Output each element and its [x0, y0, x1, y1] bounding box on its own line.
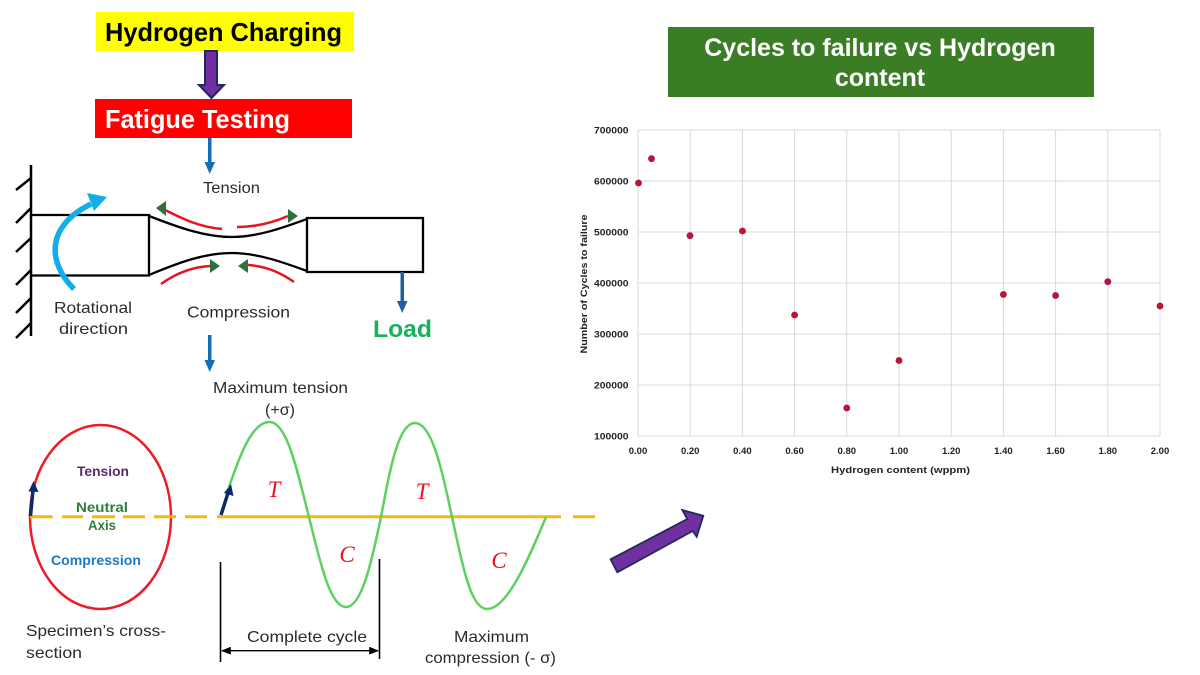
x axis labels: 0.40: [733, 446, 752, 457]
y axis labels: 700000: [594, 126, 628, 136]
y axis labels: 200000: [594, 380, 628, 392]
specimen outline: [31, 215, 423, 276]
x axis labels: 0.60: [785, 446, 804, 457]
y axis labels: 100000: [594, 432, 628, 442]
arrow: fatigue testing to specimen: [204, 138, 215, 174]
x axis title: Hydrogen content (wppm): [831, 465, 970, 476]
wave letters: C: [339, 542, 355, 567]
stress wave: [229, 422, 546, 609]
load arrow: [397, 272, 408, 313]
label: Specimen's cross-section: section: [26, 645, 82, 662]
compression arrows: [161, 259, 294, 284]
x axis labels: 2.00: [1151, 446, 1169, 457]
label: Compression: Compression: [187, 304, 290, 322]
heading: Hydrogen Charging: Hydrogen Charging: [105, 17, 342, 47]
label: Neutral Axis: Neutral: [76, 499, 128, 515]
label: Compression zone: Compression: [51, 553, 141, 568]
fixed wall: [16, 165, 31, 338]
label: Rotational direction: direction: [59, 321, 128, 338]
label: Tension zone: Tension: [77, 464, 129, 479]
label: Maximum compression: compression (- σ): [425, 650, 556, 667]
wave letters: T: [416, 479, 431, 504]
chart title: content: [835, 64, 926, 92]
x axis labels: 1.60: [1046, 446, 1065, 457]
x axis labels: 1.80: [1099, 446, 1117, 457]
x axis labels: 1.20: [942, 446, 960, 457]
arrow: purple to chart: [611, 510, 703, 572]
chart title: Cycles to failure vs Hydrogen: [704, 34, 1056, 62]
label: Load: Load: [373, 316, 432, 343]
y axis labels: 600000: [594, 176, 628, 188]
wave letters: C: [491, 548, 507, 573]
y axis labels: 400000: [594, 278, 628, 290]
heading: Fatigue Testing: Fatigue Testing: [105, 104, 290, 134]
specimen diagram: [16, 165, 423, 338]
arrow: charging to fatigue testing: [199, 51, 224, 98]
wave letters: T: [268, 477, 283, 502]
rotation arrow: [55, 193, 107, 289]
data points: [635, 156, 1163, 411]
label: Tension: Tension: [203, 180, 260, 197]
label: Neutral Axis: Axis: [88, 517, 116, 533]
label: Rotational direction: Rotational: [54, 300, 132, 317]
label: Maximum tension: Maximum tension: [213, 380, 348, 397]
complete cycle bracket: [220, 559, 380, 662]
grid lines: [638, 130, 1160, 436]
label: Complete cycle: Complete cycle: [247, 629, 367, 646]
wave letters: [268, 477, 507, 573]
label: Maximum tension: (+σ): [265, 402, 295, 419]
icon: cross-section rotation arrow: [28, 481, 38, 516]
arrow: specimen to stress cycle: [204, 335, 215, 372]
y axis labels: 300000: [594, 330, 628, 340]
label: Specimen's cross-section: Specimen’s cross-: [26, 623, 166, 640]
x axis labels: 1.00: [890, 446, 908, 457]
scatter chart: [579, 126, 1169, 476]
x axis labels: 0.20: [681, 446, 699, 457]
label: Maximum compression: Maximum: [454, 629, 529, 646]
chart title: [668, 27, 1094, 97]
x axis labels: [629, 446, 1169, 457]
x axis labels: 0.00: [629, 446, 647, 457]
neutral axis line: [30, 515, 595, 518]
y axis labels: 500000: [594, 228, 628, 238]
tension arrows: [156, 201, 298, 229]
x axis labels: 1.40: [994, 446, 1013, 457]
cross-section ellipse: [30, 425, 171, 609]
y axis title: Number of Cycles to failure: [579, 214, 590, 354]
icon: wave start arrow: [221, 484, 234, 515]
y axis labels: [594, 126, 628, 442]
heading: Fatigue Testing: [95, 99, 352, 138]
x axis labels: 0.80: [838, 446, 856, 457]
